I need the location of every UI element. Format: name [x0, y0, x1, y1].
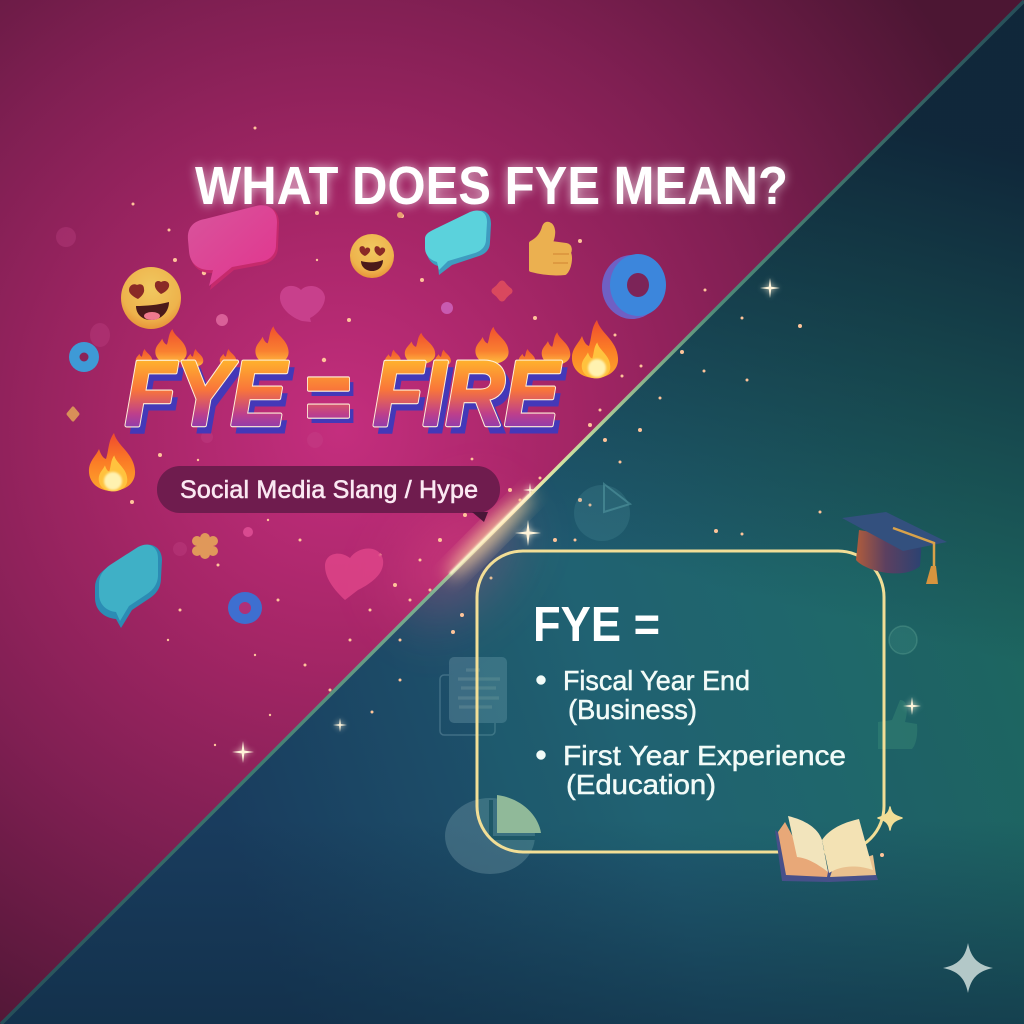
particle dots: pink side: [130, 126, 642, 746]
icon: orange diamond: [68, 408, 78, 420]
headline white outline: FYE: [125, 343, 288, 445]
small balls: [216, 212, 453, 537]
icon: gold sparkle on card corner: [878, 807, 902, 830]
faint circle: [889, 626, 917, 654]
icon: heart-eyes emoji small: [350, 234, 394, 278]
headline white outline: [125, 341, 561, 453]
icon: small blue donut left: [69, 342, 99, 372]
title: WHAT DOES FYE MEAN?: [195, 155, 788, 216]
bullet: fiscal year end: Fiscal Year End: [563, 665, 750, 696]
icon: flame left: [89, 433, 135, 491]
icon: coral sparkle flower: [495, 284, 509, 298]
sparkles: [232, 278, 921, 763]
headline extrusion: FYE: [130, 350, 293, 452]
icon: pink heart bubble lower: [325, 548, 383, 600]
headline white outline: FIRE: [373, 343, 561, 445]
bullet: first year experience: (Education): [566, 769, 716, 800]
icon: gold flower: [192, 533, 218, 559]
icon: open book: [775, 816, 878, 882]
faint pie chart top: [574, 484, 630, 541]
icon: small blue donut lower: [228, 592, 262, 624]
faint thumbs up: [878, 700, 917, 749]
bullet: fiscal year end: (Business): [568, 694, 697, 725]
card heading: FYE =: [533, 598, 660, 652]
icon: pink speech bubble: [188, 205, 279, 290]
headline: FYE = FIRE: [125, 326, 570, 458]
icon: cyan speech bubble: [425, 210, 491, 275]
icon: graduation cap: [842, 512, 947, 584]
faint background shapes: pink side: [56, 227, 323, 556]
pill label: Social Media Slang / Hype: [180, 476, 478, 504]
definition card: [477, 551, 884, 852]
headline white outline: =: [304, 341, 350, 453]
faint document icon: [440, 657, 507, 735]
headline gradient letters: =: [304, 341, 350, 453]
faint pie chart large: [445, 795, 541, 874]
icon: flame right of headline: [572, 320, 618, 378]
headline gradient letters: FYE: [125, 343, 288, 445]
icon: corner grey star: [943, 943, 993, 993]
bullet: first year experience: First Year Experience: [563, 740, 846, 771]
flames on headline: [136, 326, 570, 366]
particle dots: teal side: [370, 288, 884, 857]
headline extrusion: [130, 346, 566, 458]
bullet: first year experience: [536, 740, 846, 800]
icon: blue donut: [602, 254, 666, 319]
icon: faint heart bubble: [280, 286, 325, 322]
icon: cyan speech bubble lower: [95, 545, 162, 628]
headline gradient letters: FIRE: [373, 343, 561, 445]
headline gradient letters: [125, 341, 561, 453]
headline extrusion: =: [308, 346, 354, 458]
tag pill: social media slang: [157, 466, 500, 522]
bullet: fiscal year end: [536, 665, 750, 725]
icon: thumbs up: [531, 224, 570, 273]
headline extrusion: FIRE: [378, 350, 566, 452]
icon: heart-eyes emoji large: [121, 267, 181, 329]
